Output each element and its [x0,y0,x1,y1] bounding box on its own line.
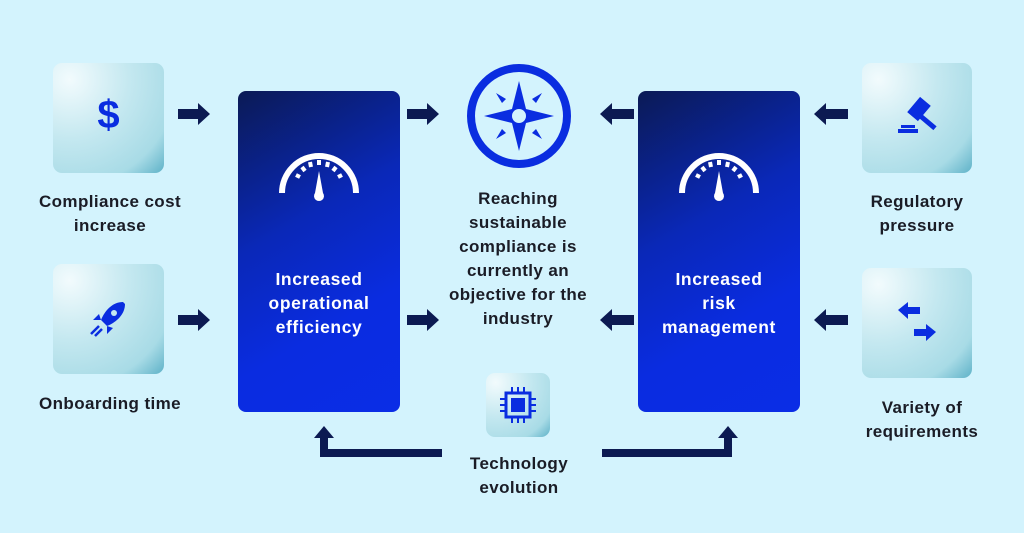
label: regulatory: Regulatory [871,192,963,211]
icon box: arrows [862,268,972,378]
icon: gauge [279,153,359,201]
panel: risk management: Increased [675,269,763,289]
center text: Reaching [478,189,558,208]
icon box: dollar [53,63,164,173]
panel: risk management: management [662,317,776,337]
panel: risk management [638,91,800,412]
label: technology [470,454,568,497]
label: technology: Technology [470,454,568,473]
icon: gauge [679,153,759,201]
icon box: chip [486,373,550,437]
panel: operational efficiency: efficiency [276,317,362,337]
center text: sustainable [469,213,567,232]
arrow: tech to right panel [602,426,738,457]
center text: industry [483,309,553,328]
icon box: rocket [53,264,164,374]
panel: risk management: risk [702,293,736,313]
icon box: gavel [862,63,972,173]
label: compliance cost [39,192,181,235]
center text: currently an [467,261,569,280]
label: variety: requirements [866,422,978,441]
panel: operational efficiency: Increased [275,269,363,289]
label: regulatory [871,192,963,235]
center text: objective for the [449,285,587,304]
arrows to center [407,103,439,125]
label: variety: Variety of [882,398,962,417]
label: variety [866,398,978,441]
center text: compliance is [459,237,577,256]
arrows from right panel [600,103,634,125]
panel: operational efficiency: operational [269,293,369,313]
label: technology: evolution [479,478,559,497]
arrows right column [814,103,848,125]
label: regulatory: pressure [879,216,955,235]
label: compliance cost: increase [74,216,146,235]
icon: compass [467,64,571,168]
center text [449,189,587,328]
arrows left column [178,103,210,125]
label: onboarding: Onboarding time [39,394,181,413]
arrow: tech to left panel [314,426,442,457]
icon box: dollar: $ [97,93,120,137]
panel: operational efficiency [238,91,400,412]
label: compliance cost: Compliance cost [39,192,181,211]
